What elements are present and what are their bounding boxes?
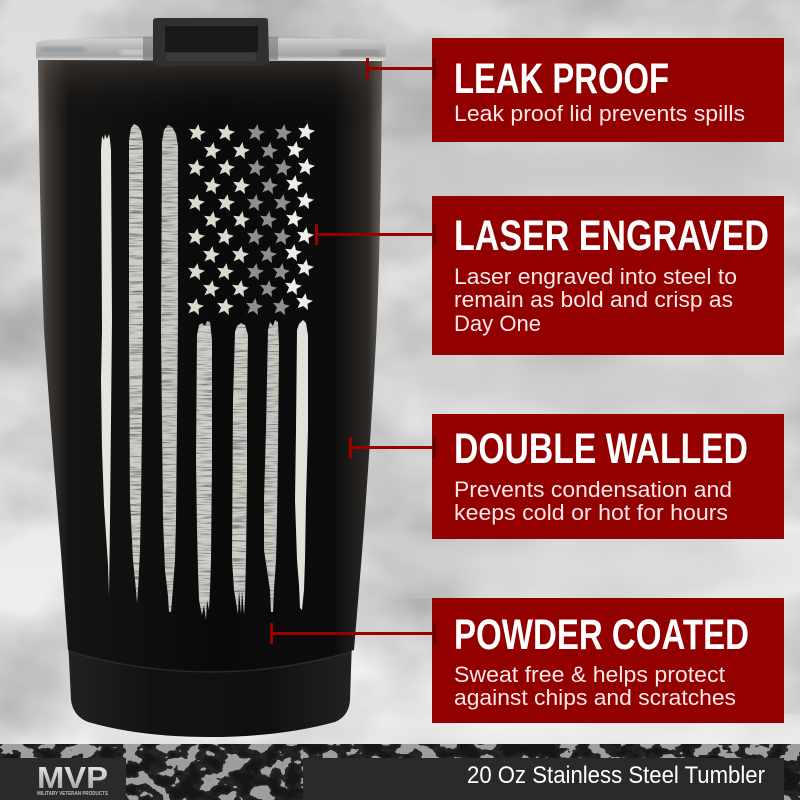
text: laser engraved description	[454, 264, 737, 336]
panel: leak proof	[432, 38, 784, 142]
base seam	[70, 652, 351, 672]
flag: short stripes	[196, 320, 308, 620]
text: laser engraved description: remain as bold and crisp as	[454, 287, 733, 312]
lid highlights	[40, 37, 380, 60]
panel: laser engraved	[432, 196, 784, 355]
text: powder coated description	[454, 662, 736, 710]
heading: leak proof: LEAK PROOF	[454, 55, 669, 103]
panel: double walled	[432, 414, 784, 539]
panel: powder coated	[432, 598, 784, 723]
text: double walled description: keeps cold or hot for hours	[454, 500, 728, 525]
text: double walled description: Prevents condensation and	[454, 477, 732, 502]
product name bar	[303, 758, 784, 800]
flag: stars	[185, 122, 316, 316]
tumbler body	[38, 60, 382, 671]
tumbler base	[68, 640, 352, 737]
logo box: MVP: MILITARY VETERAN PRODUCTS	[37, 791, 108, 797]
lid slider clip	[153, 18, 269, 66]
text: double walled description	[454, 477, 732, 525]
body top sheen	[38, 60, 382, 340]
text: powder coated description: Sweat free & helps protect	[454, 662, 726, 687]
product name bar: 20 Oz Stainless Steel Tumbler	[467, 762, 765, 789]
clear lid	[36, 36, 386, 61]
camouflage strip	[0, 744, 800, 800]
connector: leak proof	[366, 58, 436, 79]
connector: powder coated	[270, 623, 436, 644]
text: laser engraved description: Day One	[454, 311, 541, 336]
logo box: MVP: MVP	[37, 760, 108, 795]
connector: laser engraved	[315, 224, 436, 245]
tumbler	[36, 18, 386, 737]
text: leak proof description: Leak proof lid prevents spills	[454, 101, 745, 126]
text: laser engraved description: Laser engraved into steel to	[454, 264, 737, 289]
logo box: MVP	[0, 758, 126, 800]
connector: double walled	[349, 437, 436, 458]
flag: long stripes	[101, 124, 178, 612]
text: powder coated description: against chips and scratches	[454, 685, 736, 710]
footer band	[0, 744, 800, 800]
